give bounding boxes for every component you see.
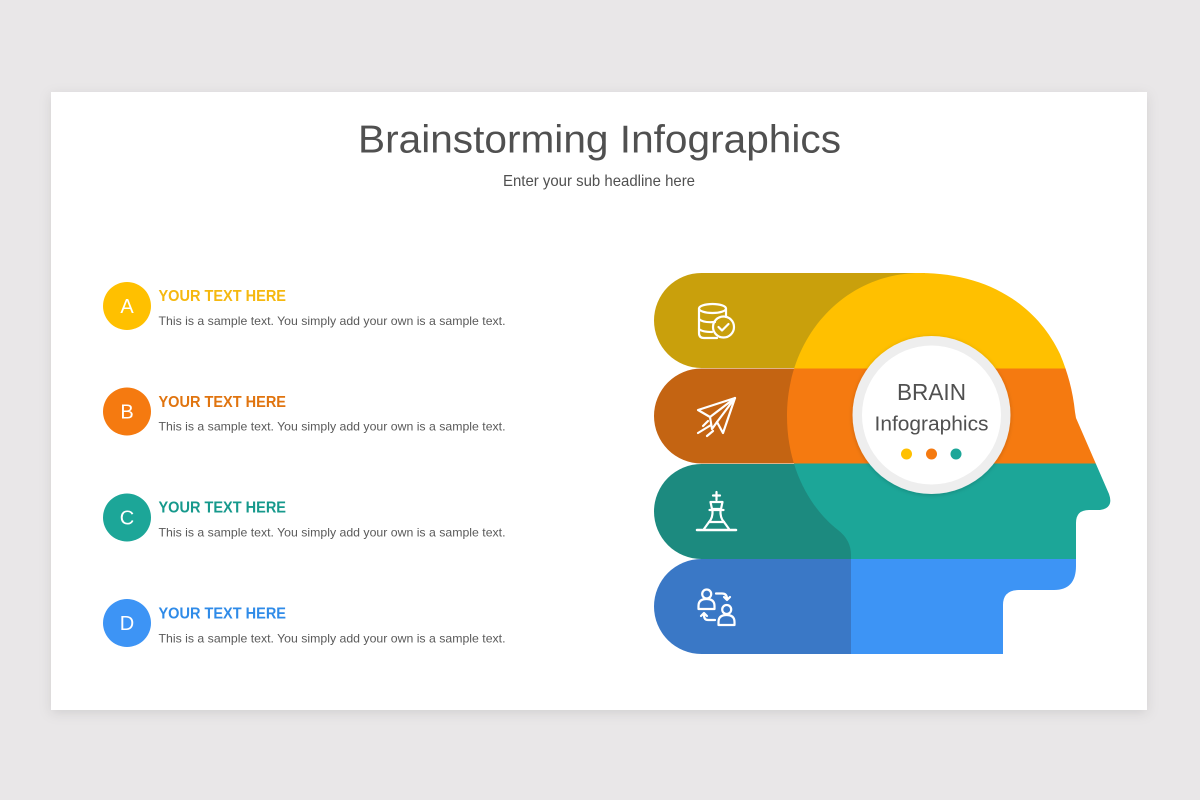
heading C: YOUR TEXT HERE bbox=[158, 500, 286, 516]
icon: chess king bbox=[697, 492, 736, 530]
body text A: This is a sample text. You simply add your own is a sample text. bbox=[158, 314, 506, 328]
dark tab: yellow bbox=[654, 273, 925, 368]
center badge bbox=[852, 336, 1010, 494]
body text B: This is a sample text. You simply add your own is a sample text. bbox=[158, 420, 506, 434]
badge A: A bbox=[120, 296, 134, 318]
heading B: YOUR TEXT HERE bbox=[158, 394, 286, 411]
heading D: YOUR TEXT HERE bbox=[158, 606, 286, 622]
dark tab: orange bbox=[654, 368, 900, 464]
badge A bbox=[103, 282, 151, 330]
subtitle: Enter your sub headline here bbox=[503, 173, 695, 190]
badge D: D bbox=[120, 613, 134, 635]
badge B bbox=[103, 388, 151, 436]
icon: database check bbox=[699, 304, 734, 338]
list item B bbox=[103, 388, 506, 436]
body text C: This is a sample text. You simply add your own is a sample text. bbox=[158, 526, 506, 540]
title: Brainstorming Infographics bbox=[358, 118, 841, 162]
badge subtitle: Infographics bbox=[874, 412, 988, 436]
badge D bbox=[103, 599, 151, 647]
dark tab: blue bbox=[654, 559, 900, 654]
icon: people exchange bbox=[698, 590, 734, 625]
heading A: YOUR TEXT HERE bbox=[158, 288, 286, 305]
badge C: C bbox=[120, 508, 134, 530]
list item A bbox=[103, 282, 506, 330]
badge C bbox=[103, 494, 151, 542]
badge title: BRAIN bbox=[897, 379, 966, 405]
badge dots bbox=[901, 448, 962, 460]
body text D: This is a sample text. You simply add your own is a sample text. bbox=[158, 632, 506, 646]
dark tab: teal bbox=[654, 464, 900, 559]
badge B: B bbox=[120, 402, 134, 424]
background card bbox=[51, 92, 1147, 710]
head silhouette bands bbox=[787, 273, 1110, 654]
icon: paper plane bbox=[698, 398, 735, 436]
list item C bbox=[103, 494, 506, 542]
list item D bbox=[103, 599, 506, 647]
head diagram bbox=[654, 265, 1120, 659]
